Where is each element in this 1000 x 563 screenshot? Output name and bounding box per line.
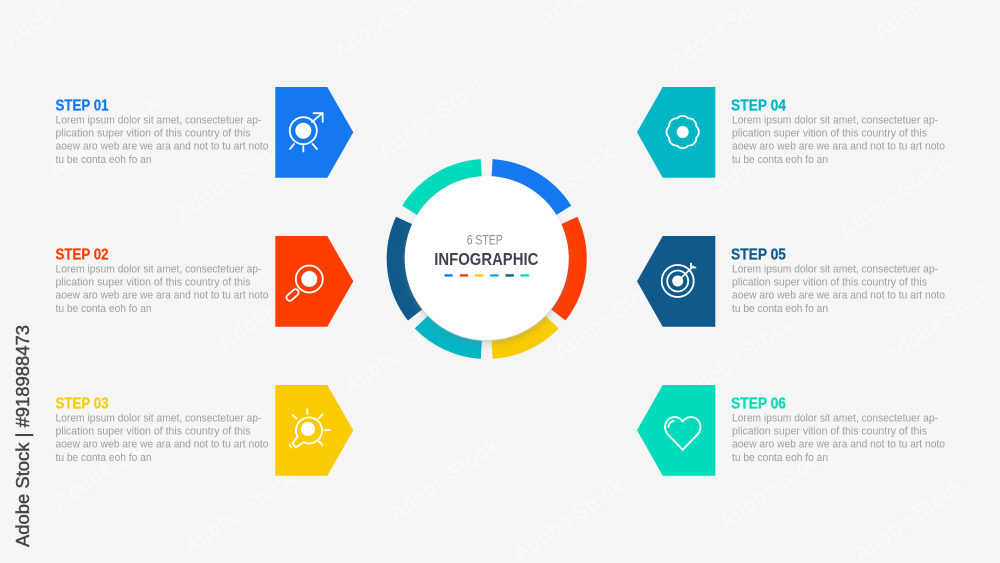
text block: step 02: plication super vition of this country of this bbox=[56, 277, 251, 289]
tab: step 06 bbox=[637, 385, 715, 476]
colour dashes bbox=[444, 274, 529, 277]
text block: step 03: tu be conta eoh fo an bbox=[56, 452, 152, 464]
text block: step 02: aoew aro web are we ara and not to tu art noto bbox=[56, 290, 268, 302]
watermark pattern: Adobe Stock bbox=[835, 151, 953, 244]
text block: step 05: plication super vition of this country of this bbox=[732, 277, 928, 289]
text block: step 01: tu be conta eoh fo an bbox=[56, 154, 152, 166]
text block: step 05: aoew aro web are we ara and not to tu art noto bbox=[732, 290, 945, 302]
heading: step 03: STEP 03 bbox=[56, 396, 109, 413]
text block: step 05: tu be conta eoh fo an bbox=[732, 303, 828, 315]
stock id vertical text: Adobe Stock | #918988473 bbox=[13, 325, 33, 547]
panel: step 05 bbox=[637, 236, 945, 327]
text block: step 06: Lorem ipsum dolor sit amet, consectetuer ap- bbox=[732, 412, 938, 424]
central ring diagram bbox=[396, 168, 578, 350]
text block: step 04: aoew aro web are we ara and not to tu art noto bbox=[732, 141, 945, 153]
watermark pattern: Adobe Stock bbox=[385, 433, 503, 526]
text block: step 04 bbox=[732, 114, 945, 166]
text block: step 02: tu be conta eoh fo an bbox=[56, 303, 152, 315]
icon: magnifier bbox=[285, 266, 323, 302]
watermark pattern: Adobe Stock bbox=[172, 133, 290, 226]
text block: step 01: Lorem ipsum dolor sit amet, consectetuer ap- bbox=[56, 114, 262, 126]
tab: step 01 bbox=[275, 87, 353, 178]
panel: step 06 bbox=[637, 385, 945, 476]
ring segment: step 01 bbox=[492, 168, 564, 210]
watermark pattern: Adobe Stock bbox=[50, 421, 168, 514]
watermark pattern: Adobe Stock bbox=[715, 441, 833, 534]
text block: step 06: aoew aro web are we ara and not to tu art noto bbox=[732, 439, 945, 451]
centre heading: infographic: INFOGRAPHIC bbox=[434, 249, 539, 269]
heading: step 06: STEP 06 bbox=[731, 396, 786, 413]
icon: target with arrow bbox=[290, 113, 323, 152]
text block: step 01: aoew aro web are we ara and not to tu art noto bbox=[56, 141, 268, 153]
watermark pattern: Adobe Stock bbox=[180, 466, 298, 559]
tab: step 02 bbox=[275, 236, 353, 327]
heading: step 02: STEP 02 bbox=[56, 247, 108, 264]
tab: step 04 bbox=[637, 87, 715, 178]
centre label: 6 step: 6 STEP bbox=[467, 231, 503, 247]
panel: step 04 bbox=[637, 87, 945, 178]
watermark pattern: Adobe Stock bbox=[680, 311, 798, 404]
text block: step 01 bbox=[56, 114, 268, 166]
panel: step 03 bbox=[56, 385, 353, 476]
centre white circle bbox=[405, 176, 569, 340]
text block: step 04: tu be conta eoh fo an bbox=[732, 154, 828, 166]
watermark pattern: Adobe Stock bbox=[45, 91, 163, 184]
text block: step 05: Lorem ipsum dolor sit amet, consectetuer ap- bbox=[732, 264, 938, 276]
icon: light bulb bbox=[290, 409, 330, 448]
text block: step 03 bbox=[56, 412, 268, 464]
text block: step 06: plication super vition of this country of this bbox=[732, 426, 928, 438]
icon: gear badge bbox=[667, 116, 699, 148]
tab: step 05 bbox=[637, 236, 715, 327]
text block: step 06 bbox=[732, 412, 945, 464]
text block: step 03: aoew aro web are we ara and not to tu art noto bbox=[56, 439, 268, 451]
text block: step 04: Lorem ipsum dolor sit amet, consectetuer ap- bbox=[732, 114, 938, 126]
text block: step 04: plication super vition of this country of this bbox=[732, 128, 928, 140]
ring segment: step 03 bbox=[492, 322, 552, 350]
icon: heart bbox=[665, 417, 700, 450]
watermark pattern: Adobe Stock bbox=[880, 276, 998, 369]
ring segment: step 04 bbox=[421, 322, 481, 350]
tab: step 03 bbox=[275, 385, 353, 476]
icon: bullseye with arrow bbox=[662, 264, 696, 297]
text block: step 06: tu be conta eoh fo an bbox=[732, 452, 828, 464]
watermark pattern: Adobe Stock bbox=[215, 261, 333, 354]
watermark pattern: Adobe Stock bbox=[500, 141, 618, 234]
text block: step 02 bbox=[56, 264, 268, 315]
heading: step 04: STEP 04 bbox=[731, 98, 786, 115]
text block: step 03: Lorem ipsum dolor sit amet, consectetuer ap- bbox=[56, 412, 262, 424]
panel: step 01 bbox=[56, 87, 353, 178]
heading: step 01: STEP 01 bbox=[56, 98, 109, 115]
ring segment: step 06 bbox=[410, 168, 481, 210]
panel: step 02 bbox=[56, 236, 353, 327]
ring segment: step 02 bbox=[558, 220, 578, 315]
watermark pattern: Adobe Stock bbox=[550, 271, 668, 364]
text block: step 02: Lorem ipsum dolor sit amet, consectetuer ap- bbox=[56, 264, 262, 276]
text block: step 01: plication super vition of this country of this bbox=[56, 128, 251, 140]
watermark pattern: Adobe Stock bbox=[340, 306, 458, 399]
ring segment: step 05 bbox=[396, 220, 415, 315]
watermark pattern: Adobe Stock bbox=[375, 71, 493, 164]
watermark pattern: Adobe Stock bbox=[710, 106, 828, 199]
text block: step 05 bbox=[732, 264, 945, 315]
text block: step 03: plication super vition of this country of this bbox=[56, 426, 251, 438]
heading: step 05: STEP 05 bbox=[731, 247, 786, 264]
